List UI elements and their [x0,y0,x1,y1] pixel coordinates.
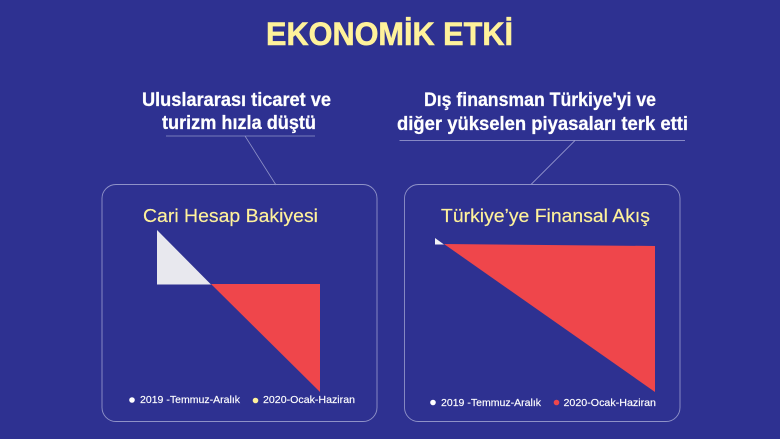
panel: Türkiye'ye Finansal Akış [404,184,680,422]
title: EKONOMİK ETKİ [266,16,513,52]
legend: left: 2020-Ocak-Haziran [263,394,355,406]
legend: left [129,394,355,406]
legend: right [430,397,656,409]
heading: right column: diğer yükselen piyasaları terk etti [397,113,688,135]
triangle: 2019 white [157,230,211,284]
heading: left column: Uluslararası ticaret ve [142,89,331,111]
legend: left: 2019 -Temmuz-Aralık [140,394,241,406]
connector: right heading to panel [400,140,685,184]
triangle: 2020 red [211,284,320,392]
triangle: 2020 red large [444,244,655,392]
heading: right column [397,89,688,135]
chart title: left: Cari Hesap Bakiyesi [143,205,318,226]
triangle: 2019 white small [435,238,444,244]
connector: left heading to panel [166,136,315,185]
panel: Cari Hesap Bakiyesi [102,184,377,422]
legend: right: 2019 -Temmuz-Aralık [441,397,542,409]
heading: right column: Dış finansman Türkiye'yi ve [424,89,656,111]
heading: left column [142,89,331,134]
legend: right: 2020-Ocak-Haziran [564,397,656,409]
chart title: right: Türkiye’ye Finansal Akış [441,205,650,226]
heading: left column: turizm hızla düştü [162,112,316,134]
